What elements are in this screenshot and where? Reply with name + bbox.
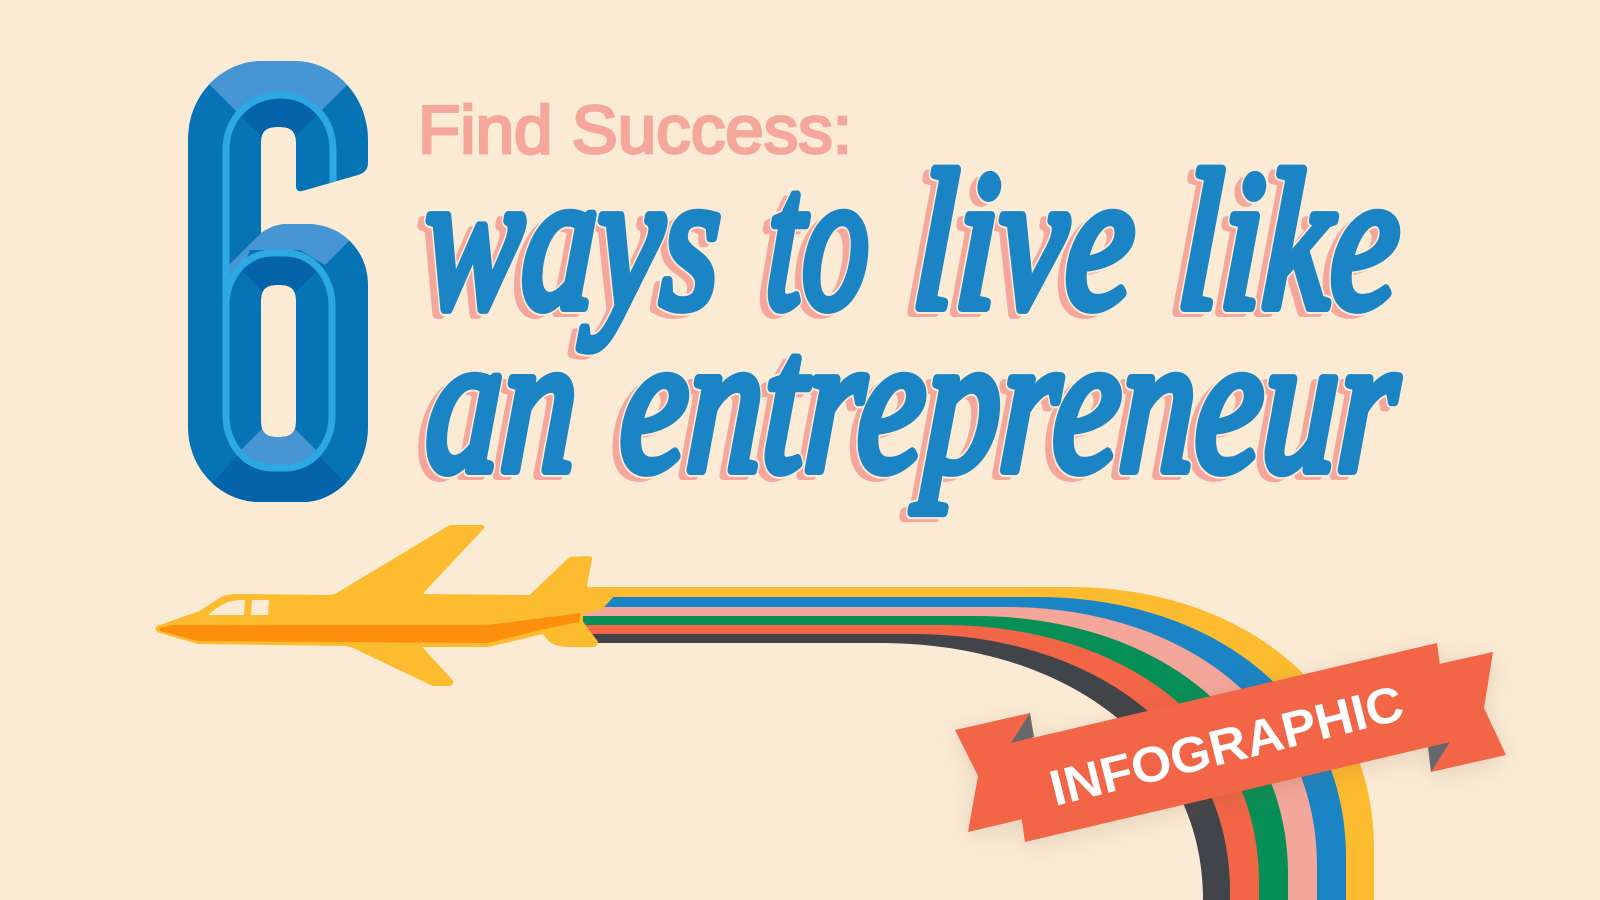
plane body [156,526,616,685]
headline: 6 ways to live like an entrepreneur [419,130,1405,513]
big numeral 6 [188,61,368,502]
headline shadow layer: live [901,135,1132,355]
ribbon label: INFOGRAPHIC [1044,675,1409,817]
subtitle: Find Success: Find Success: [418,92,852,168]
ribbon right fold [1428,742,1450,772]
headline outline gap layer [419,130,1405,513]
cockpit windows [208,600,269,615]
ribbon main band [1011,643,1450,842]
airplane [156,526,616,685]
headline shadow layer: ways [411,135,718,355]
ribbon right tail [1428,652,1506,772]
headline outline gap layer: live [909,130,1140,350]
ribbon left fold [1011,713,1034,743]
ribbon banner [955,643,1506,842]
headline outline gap layer: like [1174,130,1405,350]
headline: 6 ways to live like an entrepreneur: an [422,293,583,513]
headline outline gap layer: an [422,293,583,513]
headline: 6 ways to live like an entrepreneur: ways [419,130,726,350]
headline shadow layer: an [414,298,575,518]
ribbon left tail [955,713,1040,832]
headline shadow layer [411,135,1397,518]
headline outline gap layer: ways [419,130,726,350]
headline shadow layer: to [754,135,867,355]
rainbow trail [582,587,1374,900]
headline outline gap layer: to [762,130,875,350]
plane stripe [159,613,581,643]
headline: 6 ways to live like an entrepreneur: live [909,130,1140,350]
headline shadow layer: like [1166,135,1397,355]
headline: 6 ways to live like an entrepreneur: to [762,130,875,350]
headline: 6 ways to live like an entrepreneur: like [1174,130,1405,350]
